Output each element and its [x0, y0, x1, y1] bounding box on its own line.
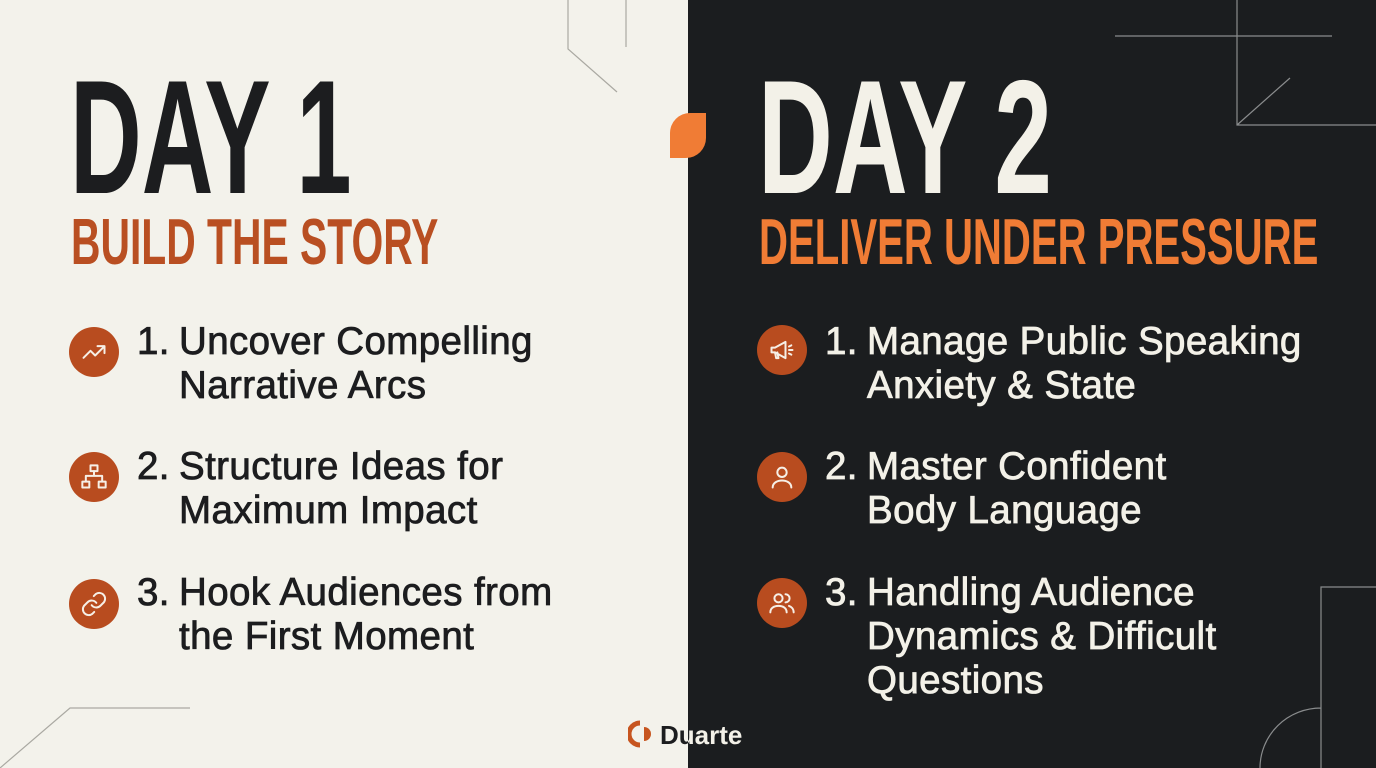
panel: day 2	[688, 0, 1376, 768]
icon: trend	[69, 327, 119, 377]
item 3: Questions	[867, 659, 1044, 702]
item 1: Uncover Compelling	[179, 320, 533, 363]
item 1: 1.	[825, 320, 858, 363]
icon: people	[757, 578, 807, 628]
icon: megaphone	[757, 325, 807, 375]
item 2: Maximum Impact	[179, 489, 478, 532]
icon: link	[69, 579, 119, 629]
item 1	[137, 320, 533, 407]
item 1: Anxiety & State	[867, 364, 1136, 407]
item 3: Dynamics & Difficult	[867, 615, 1217, 658]
icon: orange leaf	[670, 113, 706, 158]
item 2: Structure Ideas for	[179, 445, 503, 488]
item 2: Body Language	[867, 489, 1142, 532]
item 1	[825, 320, 1302, 407]
item 3: 3.	[137, 571, 170, 614]
subtitle: deliver under pressure: DELIVER UNDER PRESSURE	[759, 205, 1318, 278]
item 2: 2.	[137, 445, 170, 488]
item 2	[137, 445, 503, 532]
item 1: Narrative Arcs	[179, 364, 426, 407]
title: day 2: DAY 2	[758, 47, 1052, 228]
subtitle: build the story: BUILD THE STORY	[71, 205, 438, 278]
title: day 1: DAY 1	[70, 47, 352, 228]
item 3: the First Moment	[179, 615, 474, 658]
item 1: 1.	[137, 320, 170, 363]
item 1: Manage Public Speaking	[867, 320, 1302, 363]
item 3: 3.	[825, 571, 858, 614]
item 3: Hook Audiences from	[179, 571, 553, 614]
item 2: Master Confident	[867, 445, 1167, 488]
item 2: 2.	[825, 445, 858, 488]
item 3	[825, 571, 1217, 702]
item 3	[137, 571, 553, 658]
icon: hierarchy	[69, 452, 119, 502]
item 2	[825, 445, 1167, 532]
logo: duarte	[628, 720, 742, 750]
panel: day 1	[0, 0, 688, 768]
item 3: Handling Audience	[867, 571, 1195, 614]
icon: person	[757, 452, 807, 502]
